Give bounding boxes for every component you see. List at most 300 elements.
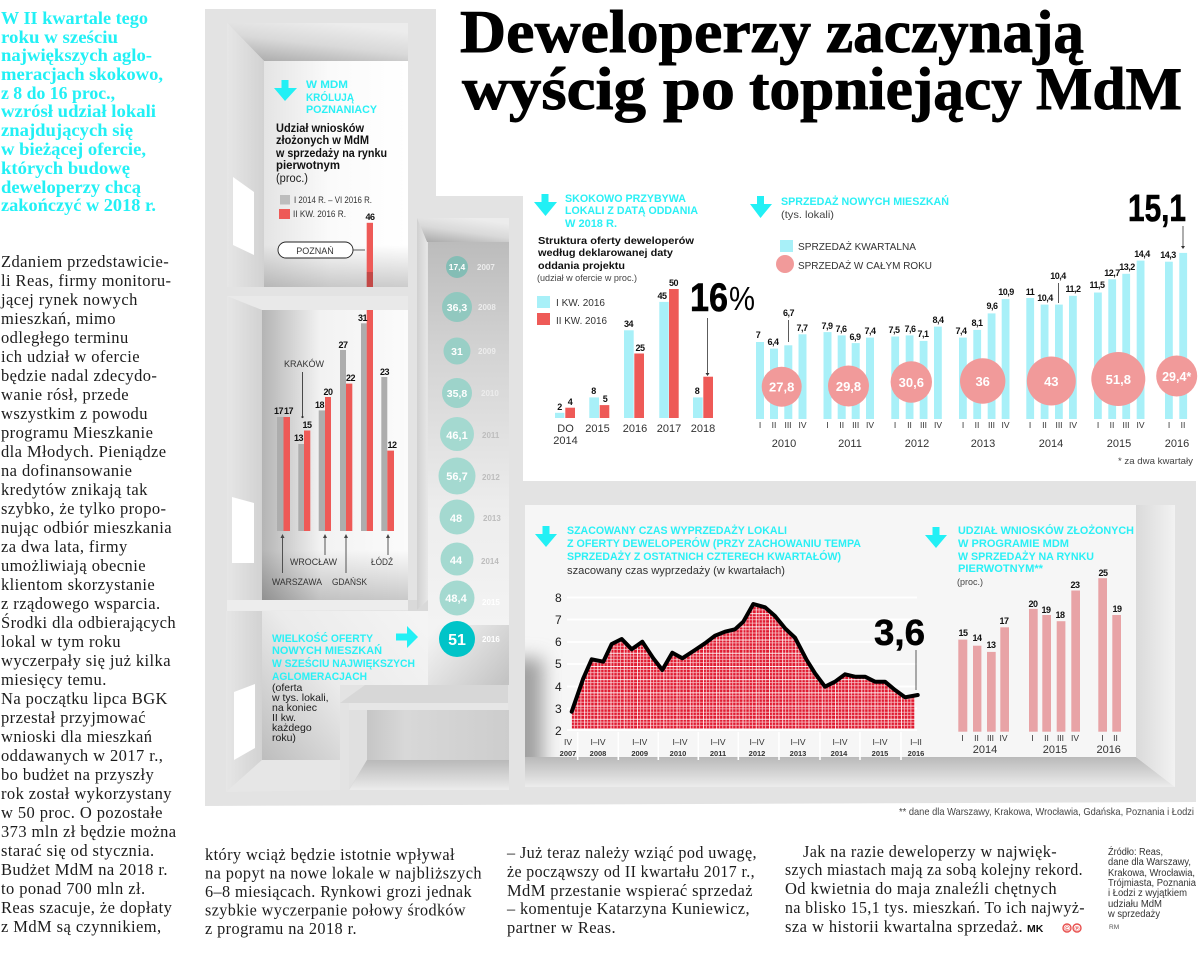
values: 4 xyxy=(568,397,573,407)
intro lead text: zakończyć w 2018 r. xyxy=(1,195,156,215)
values xyxy=(958,568,1122,650)
panel: sell-out room xyxy=(503,505,1175,787)
icon: down arrow xyxy=(274,80,297,101)
chart: offer size bubbles: 35,8 xyxy=(447,388,467,400)
values: 23 xyxy=(380,367,389,377)
y axis labels: 6 xyxy=(555,635,562,649)
yearly sales circles: 43 xyxy=(1044,374,1059,389)
heading xyxy=(781,195,949,221)
heading: offer size: NOWYCH MIESZKAŃ xyxy=(272,644,382,657)
x axis labels: I–IV xyxy=(632,737,648,747)
values: 17 xyxy=(284,406,293,416)
year labels: 2013 xyxy=(971,438,995,450)
chart: offer size bubbles: 2008 xyxy=(478,303,496,312)
article text: left column: oddawanych w 2017 r., xyxy=(1,746,163,765)
source note: RM xyxy=(1109,924,1119,931)
values: 13,2 xyxy=(1119,262,1135,272)
values: 6,7 xyxy=(783,308,794,318)
chart: offer size bubbles: 2014 xyxy=(481,557,499,566)
chart: offer size bubbles: 48,4 xyxy=(445,593,468,605)
values: 7,4 xyxy=(955,326,967,336)
article text: column 4: Od kwietnia do maja znaleźli chętnych xyxy=(785,879,1057,898)
heading: UDZIAŁ WNIOSKÓW ZŁOŻONYCH xyxy=(958,524,1134,537)
source note: w sprzedaży xyxy=(1107,909,1160,920)
x axis labels: I–IV xyxy=(590,737,606,747)
bars xyxy=(756,253,1187,419)
axis labels: 2015 xyxy=(1043,744,1067,756)
legend: SPRZEDAŻ W CAŁYM ROKU xyxy=(798,259,932,272)
title: wyścig xyxy=(462,56,646,122)
article text: left column: wnioski dla mieszkań xyxy=(1,727,152,746)
article text: left column: miesięcy temu. xyxy=(1,670,107,689)
values: 10,4 xyxy=(1050,271,1066,281)
note: (oferta xyxy=(272,682,303,694)
article text: column 3: partner w Reas. xyxy=(507,918,616,937)
values: 13 xyxy=(986,640,996,650)
quarter labels: IV xyxy=(1069,420,1077,430)
city labels: WARSZAWA xyxy=(272,577,323,588)
values: 18 xyxy=(315,400,324,410)
yearly sales circles: 30,6 xyxy=(899,375,924,390)
x axis labels: 2012 xyxy=(749,749,765,758)
article text: left column: z rządowego wsparcia. xyxy=(1,594,161,613)
values: 14,4 xyxy=(1134,249,1150,259)
heading: SPRZEDAŻ NOWYCH MIESZKAŃ xyxy=(781,195,949,208)
source note xyxy=(1107,845,1196,931)
heading: SZACOWANY CZAS WYPRZEDAŻY LOKALI xyxy=(567,524,787,537)
axis labels xyxy=(553,423,715,447)
yearly sales circles: 29,8 xyxy=(836,379,861,394)
x axis labels: 2007 xyxy=(560,749,576,758)
values: 27 xyxy=(338,340,348,350)
year labels xyxy=(772,438,1189,450)
icon: down arrow xyxy=(534,194,557,216)
axis labels: I xyxy=(1031,733,1034,743)
year labels: 2011 xyxy=(838,438,862,450)
callout: 16%: 16 xyxy=(690,276,728,320)
article text: left column: będzie nadal zdecydo- xyxy=(1,366,157,385)
intro lead text: wzrósł udział lokali xyxy=(1,101,156,121)
line xyxy=(572,604,918,712)
intro lead text: deweloperzy chcą xyxy=(1,177,141,197)
quarter labels: II xyxy=(1181,420,1185,430)
year labels: 2012 xyxy=(905,438,929,450)
quarter labels: III xyxy=(920,420,927,430)
subtitle: pierwotnym xyxy=(276,160,340,172)
article text: column 4: na blisko 15,1 tys. mieszkań. To ich najwyż- xyxy=(785,898,1085,917)
article text: column 3: – komentuje Katarzyna Kuniewicz, xyxy=(506,899,750,918)
chart: offer size bubbles: 2010 xyxy=(481,389,499,398)
heading: SPRZEDAŻY Z OSTATNICH CZTERECH KWARTAŁÓW) xyxy=(567,550,841,563)
values: 46 xyxy=(365,212,375,222)
article text: column 2: 6–8 miesiącach. Rynkowi grozi jednak xyxy=(205,882,472,901)
x axis labels: 2011 xyxy=(710,749,726,758)
axis labels: II xyxy=(1113,733,1118,743)
source note: Źródło: Reas, xyxy=(1108,845,1163,858)
quarter labels: I xyxy=(1097,420,1099,430)
heading: W SPRZEDAŻY NA RYNKU xyxy=(958,550,1094,563)
values: 6,9 xyxy=(849,332,861,342)
legend: II KW. 2016 R. xyxy=(293,209,346,219)
heading: W MDM królują poznaniacy xyxy=(306,79,378,116)
note: roku) xyxy=(272,732,296,744)
values: 15 xyxy=(958,628,968,638)
values: 50 xyxy=(669,278,678,288)
chart: offer size bubbles: 31 xyxy=(451,346,463,358)
quarter labels: I xyxy=(1168,420,1170,430)
values: 45 xyxy=(657,291,667,301)
chart: offer size bubbles: 17,4 xyxy=(449,262,466,272)
yearly sales circles xyxy=(762,352,1197,407)
quarter labels: II xyxy=(907,420,912,430)
note: w tys. lokali, xyxy=(271,692,329,704)
article text: left column: wyczerpały się już kilka xyxy=(1,651,171,670)
heading: offer size: AGLOMERACJACH xyxy=(272,671,367,683)
y axis labels: 2 xyxy=(555,724,562,738)
values: 7,7 xyxy=(796,323,808,333)
yearly sales circles: 27,8 xyxy=(769,380,794,394)
subtitle: złożonych w MdM xyxy=(276,135,369,147)
x axis labels: I–IV xyxy=(790,737,806,747)
heading: W MDM królują poznaniacy: KRÓLUJĄ xyxy=(306,91,354,104)
chart: offer size bubbles: 2013 xyxy=(483,514,501,523)
heading: SKOKOWO PRZYBYWA xyxy=(565,193,686,205)
subtitle: według deklarowanej daty xyxy=(537,247,673,259)
values: 18 xyxy=(1055,610,1065,620)
quarter labels: III xyxy=(784,420,792,430)
x axis labels: I–IV xyxy=(832,737,848,747)
axis labels: III xyxy=(987,733,994,743)
chart: offer size bubbles: 2016 xyxy=(482,635,500,644)
quarter labels: I xyxy=(1029,420,1031,430)
quarter labels: I xyxy=(826,420,829,430)
year labels: 2014 xyxy=(1039,438,1063,450)
values: 7 xyxy=(756,330,761,340)
values: 8 xyxy=(695,386,700,396)
values: 11,5 xyxy=(1089,280,1105,290)
article text: column 3: MdM przestanie wspierać sprzedaż xyxy=(507,881,753,900)
subtitle: (udział w ofercie w proc.) xyxy=(537,273,637,283)
callout: 15,1: 15,1 xyxy=(1128,188,1186,230)
article text: column 4: sza w historii kwartalna sprzedaż. xyxy=(785,917,1023,936)
values: 34 xyxy=(624,319,633,329)
article text: left column: kredytów znikają tak xyxy=(1,480,148,499)
x axis labels: I–IV xyxy=(749,737,765,747)
axis labels: I xyxy=(1101,733,1104,743)
values: 7,1 xyxy=(917,329,929,339)
chart: offer size bubbles xyxy=(271,256,501,744)
legend xyxy=(776,240,932,273)
quarter labels: III xyxy=(988,420,995,430)
x axis labels: 2008 xyxy=(590,749,606,758)
article text: left column: Na początku lipca BGK xyxy=(1,689,168,708)
chart: offer size bubbles: 2012 xyxy=(482,473,500,482)
title: topniejący xyxy=(749,56,1022,122)
axis labels: IV xyxy=(1071,733,1079,743)
chart: offer size bubbles: 46,1 xyxy=(446,430,468,442)
callout: 16%: % xyxy=(729,280,755,317)
y axis labels: 3 xyxy=(555,702,562,716)
x axis labels: I–II xyxy=(910,737,922,747)
heading: (proc.) xyxy=(957,577,983,588)
axis labels: III xyxy=(1057,733,1064,743)
icon: down arrow xyxy=(925,527,947,548)
article text: left column: szybko, że tylko propo- xyxy=(1,499,166,518)
year labels: 2015 xyxy=(1107,438,1131,450)
article text: left column: starać się od stycznia. xyxy=(1,841,155,860)
article text: column 2: który wciąż będzie istotnie wpływał xyxy=(205,845,455,864)
values: 10,9 xyxy=(998,287,1014,297)
quarter labels: IV xyxy=(1001,420,1010,430)
panel: cities room xyxy=(227,296,408,611)
values: 7,5 xyxy=(888,325,900,335)
yearly sales circles: 36 xyxy=(975,374,990,389)
chart: offer size bubbles: 48 xyxy=(450,513,462,525)
article text: left column: klientom skorzystanie xyxy=(1,575,155,594)
values: 17 xyxy=(274,406,283,416)
values: 8,1 xyxy=(971,318,983,328)
heading: (tys. lokali) xyxy=(781,209,834,221)
values: 19 xyxy=(1041,605,1051,615)
axis labels: 2018 xyxy=(691,423,715,435)
intro lead text xyxy=(1,8,163,215)
chart: offer size bubbles: 36,3 xyxy=(447,302,467,314)
source note: udziału MdM xyxy=(1108,899,1162,910)
heading: offer size: WIELKOŚĆ OFERTY xyxy=(272,632,374,645)
article text: column 4: MK xyxy=(1027,923,1044,935)
source note: i Łodzi z wyjątkiem xyxy=(1108,888,1187,899)
article text: left column: to ponad 700 mln zł. xyxy=(1,879,146,898)
x axis labels: 2010 xyxy=(670,749,686,758)
heading xyxy=(567,524,861,577)
heading: LOKALI Z DATĄ ODDANIA xyxy=(565,205,698,217)
intro lead text: z 8 do 16 proc., xyxy=(1,83,115,103)
axis labels: I xyxy=(961,733,964,743)
intro lead text: meracjach skokowo, xyxy=(1,64,163,84)
chart: offer size bubbles: 2011 xyxy=(482,431,500,440)
year labels: 2010 xyxy=(772,438,796,450)
article text: left column: za dwa lata, firmy xyxy=(1,537,128,556)
icons: licence marks: © xyxy=(1064,925,1070,933)
values: 8 xyxy=(591,386,596,396)
quarter labels xyxy=(759,420,1185,430)
gridlines xyxy=(567,598,917,730)
values: 11,2 xyxy=(1065,284,1081,294)
quarter labels: II xyxy=(975,420,979,430)
city labels: ŁÓDŹ xyxy=(371,557,393,568)
title: po xyxy=(663,56,735,122)
article text: left column: wanie rósł, przede xyxy=(1,385,129,404)
values: 11 xyxy=(1026,287,1035,297)
callout: Poznań xyxy=(278,242,365,258)
chart: offer size bubbles: 44 xyxy=(450,555,463,567)
article text: left column: z MdM są czynnikiem, xyxy=(1,917,162,936)
intro lead text: W II kwartale tego xyxy=(1,8,148,28)
article text: column 2: na popyt na nowe lokale w najbliższych xyxy=(205,864,482,882)
axis labels: 2017 xyxy=(657,423,681,435)
heading xyxy=(565,193,698,230)
subtitle: oddania projektu xyxy=(538,260,625,272)
legend: I KW. 2016 xyxy=(556,297,605,309)
intro lead text: roku w sześciu xyxy=(1,27,118,47)
chart: offer size bubbles: 56,7 xyxy=(446,471,468,483)
article text: left column: dla Młodych. Pieniądze xyxy=(1,442,166,461)
quarter labels: II xyxy=(839,420,844,430)
callout: 15,1 xyxy=(1128,188,1186,249)
axis labels: IV xyxy=(999,733,1008,743)
x axis labels: 2013 xyxy=(790,749,806,758)
article text: left column: Budżet MdM na 2018 r. xyxy=(1,860,168,879)
y axis labels: 7 xyxy=(555,613,562,627)
title: zaczynają xyxy=(826,0,1084,65)
values xyxy=(274,212,397,450)
x axis labels xyxy=(560,732,924,760)
title: Deweloperzy xyxy=(460,0,811,65)
article text: left column: Środki dla odbierających xyxy=(1,613,176,632)
bars xyxy=(555,289,713,418)
legend: SPRZEDAŻ KWARTALNA xyxy=(798,240,916,253)
chart: completion date xyxy=(534,193,755,447)
quarter labels: I xyxy=(759,420,761,430)
article text: column 4 xyxy=(785,842,1085,936)
values: 6,4 xyxy=(767,337,779,347)
heading: offer size: W SZEŚCIU NAJWIĘKSZYCH xyxy=(272,657,415,670)
legend: I 2014 R. – VI 2016 R. xyxy=(294,195,372,205)
chart: offer size bubbles: 2007 xyxy=(477,263,495,272)
chart: new apartment sales xyxy=(750,188,1197,467)
chart: estimated sell-out time xyxy=(535,524,925,760)
quarter labels: III xyxy=(852,420,859,430)
values: 25 xyxy=(635,343,645,353)
panel: offer column room xyxy=(226,218,509,793)
axis labels: II xyxy=(974,733,979,743)
values: 31 xyxy=(358,313,367,323)
article text: column 3: – Już teraz należy wziąć pod uwagę, xyxy=(506,843,757,862)
article text: left column: na dofinansowanie xyxy=(1,461,132,480)
values: 15 xyxy=(302,420,312,430)
article text: left column: nując odbiór mieszkania xyxy=(1,518,172,537)
heading: W MDM królują poznaniacy: W MDM xyxy=(306,79,348,91)
axis labels: 2016 xyxy=(623,423,647,435)
values: 19 xyxy=(1112,604,1122,614)
quarter labels: IV xyxy=(934,420,942,430)
article text: left column: w 50 proc. O pozostałe xyxy=(1,803,163,822)
article text: left column: li Reas, firmy monitoru- xyxy=(1,271,171,290)
x axis labels: I–IV xyxy=(672,737,688,747)
quarter labels: IV xyxy=(866,420,874,430)
article text: column 4: Jak na razie deweloperzy w najwięk- xyxy=(803,842,1057,861)
legend xyxy=(279,195,372,219)
values: 17 xyxy=(999,616,1009,626)
quarter labels: III xyxy=(1122,420,1130,430)
y axis labels: 5 xyxy=(555,657,562,671)
values: 7,6 xyxy=(904,324,916,334)
source note: dane dla Warszawy, xyxy=(1108,857,1191,868)
heading: W PROGRAMIE MDM xyxy=(958,538,1069,550)
values: 12,7 xyxy=(1104,268,1120,278)
article text: left column: przestał przyjmować xyxy=(1,708,146,727)
area xyxy=(572,604,915,729)
article text: left column xyxy=(0,252,177,936)
axis labels: 2016 xyxy=(1096,744,1121,756)
icon: down arrow xyxy=(750,196,772,218)
article text: left column: bo budżet na przyszły xyxy=(1,765,154,784)
x axis labels: I–IV xyxy=(872,737,888,747)
article text: left column: mieszkań, mimo xyxy=(1,309,116,328)
x axis labels: 2015 xyxy=(872,749,888,758)
x axis labels: 2009 xyxy=(631,749,648,758)
article text: column 2: z programu na 2018 r. xyxy=(205,919,357,938)
year labels: 2016 xyxy=(1165,438,1189,450)
values: 20 xyxy=(1028,599,1038,609)
city labels: WROCŁAW xyxy=(290,557,337,568)
values: 20 xyxy=(323,387,333,397)
values: 14,3 xyxy=(1160,250,1176,260)
article text: left column: programu Mieszkanie xyxy=(1,423,153,442)
quarter labels: IV xyxy=(1136,420,1145,430)
axis labels: 2014 xyxy=(553,435,578,447)
heading: Z OFERTY DEWELOPERÓW (PRZY ZACHOWANIU TEMPA xyxy=(567,537,861,550)
panel: Poznań room xyxy=(227,23,408,287)
y axis labels: 8 xyxy=(555,591,562,605)
values: 7,4 xyxy=(864,326,876,336)
heading: W 2018 R. xyxy=(565,218,617,230)
article text: left column: Zdaniem przedstawicie- xyxy=(1,252,169,271)
intro lead text: których budowę xyxy=(1,158,130,178)
source note: Krakowa, Wrocławia, xyxy=(1108,868,1195,879)
article text: column 2 xyxy=(205,845,482,938)
article text: left column: wszystkim z powodu xyxy=(1,404,148,423)
article text: left column: 373 mln zł będzie można xyxy=(1,822,177,841)
yearly sales circles: 51,8 xyxy=(1106,372,1131,387)
callout: 16% xyxy=(690,276,755,376)
intro lead text: największych aglo- xyxy=(1,45,152,65)
quarter labels: II xyxy=(772,420,776,430)
axis labels: 2015 xyxy=(585,423,610,435)
article text: left column: ich udział w ofercie xyxy=(1,347,140,366)
x axis labels: IV xyxy=(564,737,572,747)
axis labels xyxy=(961,733,1121,756)
quarter labels: I xyxy=(962,420,964,430)
subtitle xyxy=(275,123,387,185)
heading: PIERWOTNYM** xyxy=(958,563,1044,575)
quarter labels: I xyxy=(894,420,896,430)
heading: W MDM królują poznaniacy: POZNANIACY xyxy=(306,104,378,116)
footnote: * za dwa kwartały xyxy=(1118,456,1193,467)
values: 7,9 xyxy=(821,321,833,331)
quarter labels: IV xyxy=(798,420,807,430)
values: 22 xyxy=(346,373,355,383)
x axis labels: 2014 xyxy=(831,749,848,758)
axis labels: 2014 xyxy=(973,744,997,756)
legend: II KW. 2016 xyxy=(556,315,607,327)
subtitle: Struktura oferty deweloperów xyxy=(538,235,695,247)
values: 13 xyxy=(294,433,303,443)
axis labels: II xyxy=(1044,733,1049,743)
values: 23 xyxy=(1070,580,1080,590)
y axis labels: 4 xyxy=(555,680,562,694)
values: 9,6 xyxy=(986,301,998,311)
x axis labels: I–IV xyxy=(710,737,726,747)
values: 10,4 xyxy=(1037,293,1053,303)
values xyxy=(557,278,700,412)
y axis labels xyxy=(555,591,562,738)
article text: left column: umożliwiają obecnie xyxy=(1,556,146,575)
article text: column 2: szybkie wyczerpanie połowy środków xyxy=(205,900,466,920)
values: 7,6 xyxy=(835,324,847,334)
building background xyxy=(205,9,1196,806)
values xyxy=(756,249,1176,347)
